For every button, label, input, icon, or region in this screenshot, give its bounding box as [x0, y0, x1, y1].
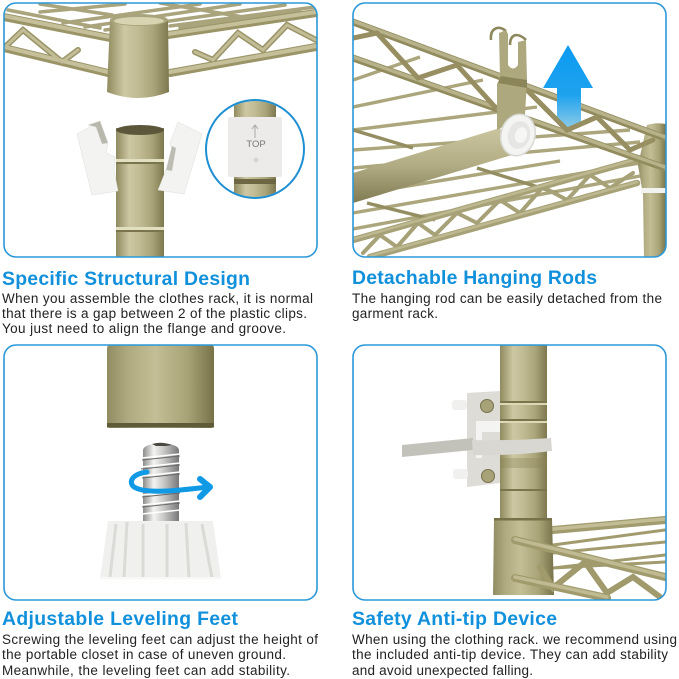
- pole with grooves: [116, 125, 164, 258]
- description: [2, 291, 313, 336]
- text block: detachable hanging rods: [352, 267, 662, 321]
- wire shelf frame: [4, 3, 316, 73]
- upper front rail: [353, 21, 665, 168]
- inset circle: clip close-up: TOP: [246, 139, 266, 150]
- shelf wires: [353, 57, 640, 229]
- heading: Detachable Hanging Rods: [352, 267, 597, 289]
- description: When you assemble the clothes rack, it is normal: [2, 291, 313, 306]
- inset circle: clip close-up: [206, 100, 304, 198]
- description: the included anti-tip device. They can add stability: [352, 647, 668, 662]
- description: [352, 632, 677, 678]
- rod end knob: [500, 114, 536, 156]
- socket sleeve: [493, 518, 554, 595]
- description: Screwing the leveling feet can adjust the height of: [2, 632, 318, 647]
- panel: safety anti-tip device: [353, 345, 666, 600]
- white plastic clips: [77, 121, 202, 195]
- wall bracket: [452, 391, 500, 487]
- cable tie strap: [402, 438, 552, 457]
- corner post: [638, 123, 666, 257]
- blue up arrow: [543, 45, 593, 128]
- heading: Safety Anti-tip Device: [352, 608, 557, 630]
- text block: adjustable leveling feet: [2, 608, 318, 678]
- panel: detachable hanging rods: [353, 3, 666, 257]
- hook bracket: [491, 28, 527, 130]
- panel: specific structural design: [4, 3, 317, 258]
- rack pole: [500, 345, 547, 520]
- description: [2, 632, 318, 678]
- description: Meanwhile, the leveling feet can add stability.: [2, 663, 290, 678]
- description: garment rack.: [352, 306, 438, 321]
- pole sleeve: [107, 345, 214, 428]
- blue rotation arrow: [131, 472, 210, 497]
- description: The hanging rod can be easily detached from the: [352, 291, 662, 306]
- shelf front rail: [515, 539, 665, 598]
- heading: Specific Structural Design: [2, 268, 250, 290]
- shelf wires: [553, 519, 665, 568]
- description: that there is a gap between 2 of the plastic clips.: [2, 306, 307, 321]
- rail over arrow base: [527, 90, 597, 130]
- heading: Adjustable Leveling Feet: [2, 608, 239, 630]
- text block: safety anti-tip device: [352, 608, 677, 678]
- lower front rail: [353, 159, 637, 257]
- text block: specific structural design: [2, 268, 313, 336]
- hanging rod: [353, 128, 512, 203]
- panel: adjustable leveling feet: [4, 345, 317, 600]
- description: [352, 291, 662, 321]
- description: You just need to align the flange and groove.: [2, 321, 286, 336]
- threaded screw: [141, 443, 180, 521]
- plastic foot knob: [100, 521, 221, 580]
- shelf corner sleeve: [107, 14, 169, 98]
- description: and avoid unexpected falling.: [352, 663, 533, 678]
- description: When using the clothing rack. we recommend using: [352, 632, 677, 647]
- description: the portable closet in case of uneven ground.: [2, 647, 286, 662]
